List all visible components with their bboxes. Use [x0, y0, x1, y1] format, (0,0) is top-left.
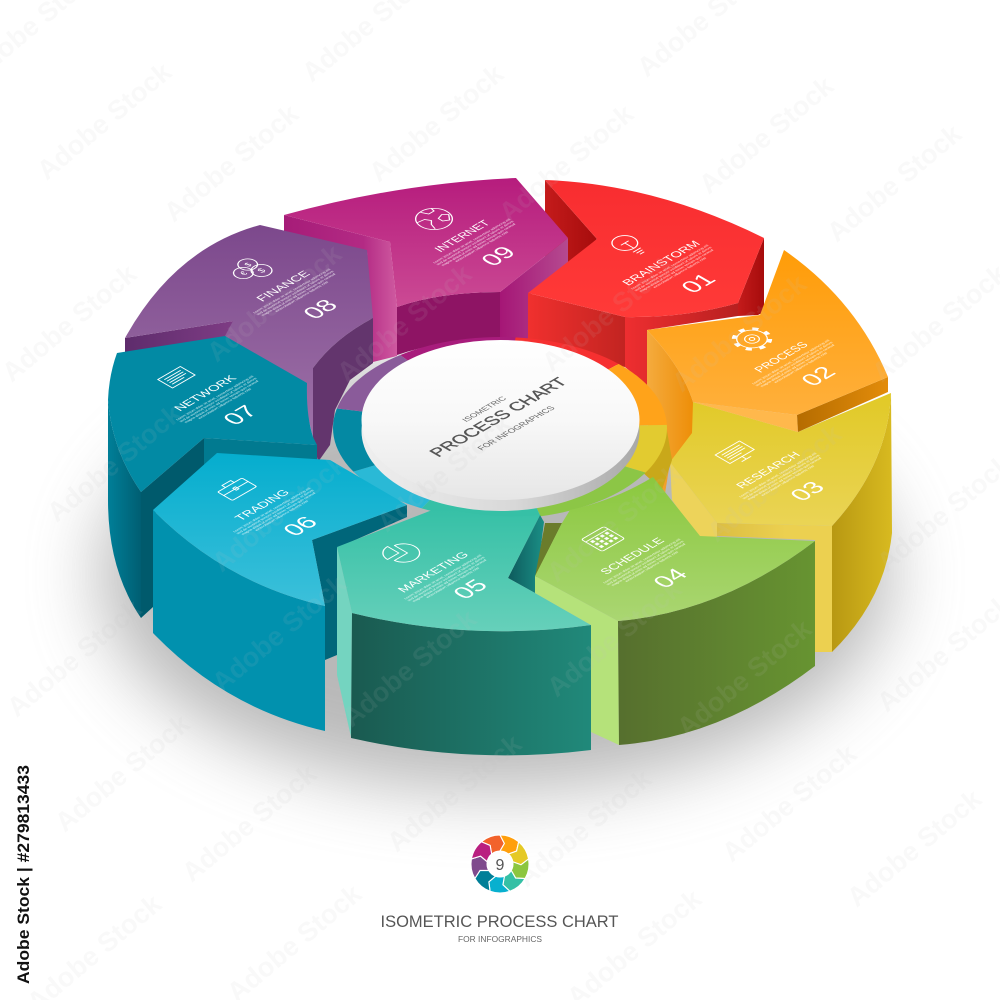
- body text: magna aliqua ut enim ad minim veniam quis nostrud: [411, 559, 488, 603]
- panel: 05 marketing: [337, 507, 591, 755]
- panel: 02 process: [647, 250, 888, 500]
- front wall light: [693, 402, 798, 432]
- panel: 04 schedule: [535, 477, 815, 745]
- top face: [670, 393, 891, 526]
- body text: [432, 218, 522, 270]
- watermark: Adobe Stock: [206, 568, 353, 698]
- footer title: ISOMETRIC PROCESS CHART: [380, 912, 618, 931]
- body text: [252, 268, 342, 320]
- ring: inner colored sectors: [333, 337, 672, 516]
- body text: Lorem ipsum dolor sit amet, consectetur adipiscing elit: [630, 244, 710, 290]
- body text: exercitation ullamco laboris nisi: [624, 551, 680, 583]
- front wall: [618, 541, 815, 745]
- number: 07: [217, 401, 263, 429]
- notch wall: [125, 321, 233, 356]
- body text: magna aliqua ut enim ad minim veniam quis nostrud: [440, 223, 517, 267]
- watermark: Adobe Stock: [493, 98, 640, 228]
- body text: [738, 452, 828, 504]
- body text: magna aliqua ut enim ad minim veniam quis nostrud: [610, 543, 687, 587]
- body text: sed do eiusmod tempor incididunt ut labore et dolore: [605, 540, 685, 586]
- body text: [232, 487, 322, 539]
- top face: [153, 453, 407, 606]
- body text: exercitation ullamco laboris nisi: [760, 465, 816, 497]
- hub rim: [362, 351, 640, 511]
- wall: red notch: [545, 180, 597, 285]
- watermark: Adobe Stock: [541, 573, 688, 703]
- notch wall: [535, 523, 562, 577]
- front wall dark: [797, 377, 888, 432]
- side stock credit: Adobe Stock | #279813433: [14, 765, 33, 984]
- body text: exercitation ullamco laboris nisi: [652, 257, 708, 289]
- icon: light bulb: [607, 232, 651, 258]
- body text: Lorem ipsum dolor sit amet, consectetur adipiscing elit: [738, 452, 818, 498]
- title: FINANCE: [254, 269, 314, 304]
- watermark: Adobe Stock: [31, 56, 178, 186]
- icon: document: [158, 366, 195, 388]
- number: 01: [675, 269, 721, 297]
- notch wall left: [141, 438, 204, 618]
- left wall: [337, 547, 352, 737]
- watermark: Adobe Stock: [511, 763, 658, 893]
- footer subtitle: FOR INFOGRAPHICS: [458, 934, 542, 944]
- body text: exercitation ullamco laboris nisi: [773, 352, 829, 384]
- top face: [647, 250, 888, 415]
- icon: briefcase: [214, 476, 257, 500]
- icon: globe: [408, 204, 460, 234]
- icon: coins: €: [238, 270, 250, 277]
- hub top: [362, 340, 640, 500]
- watermark: Adobe Stock: [701, 418, 848, 548]
- notch wall: [508, 515, 544, 593]
- body text: magna aliqua ut enim ad minim veniam quis nostrud: [638, 249, 715, 293]
- body text: Lorem ipsum dolor sit amet, consectetur adipiscing elit: [175, 375, 255, 421]
- body text: sed do eiusmod tempor incididunt ut labore et dolore: [435, 220, 515, 266]
- icon: coins: $: [255, 267, 268, 274]
- number: 08: [297, 295, 343, 323]
- body text: [175, 375, 265, 427]
- icon: footer logo wheel: [469, 833, 531, 893]
- outer wall: [153, 510, 325, 731]
- number: 06: [277, 512, 323, 540]
- panel: 07 network: [108, 336, 317, 618]
- body text: [630, 244, 720, 296]
- outer wall: [832, 393, 892, 652]
- icon: coins: [224, 255, 276, 285]
- top face: [528, 180, 764, 317]
- watermark: Adobe Stock: [381, 728, 528, 858]
- body text: magna aliqua ut enim ad minim veniam quis nostrud: [759, 344, 836, 388]
- icon: monitor: [715, 441, 759, 466]
- left inner wall: [528, 293, 625, 367]
- number: 05: [447, 575, 493, 603]
- inner wall: [313, 318, 373, 462]
- icon: coins: $: [242, 261, 254, 268]
- panel: 03 research: [670, 393, 892, 652]
- body text: sed do eiusmod tempor incididunt ut labore et dolore: [633, 246, 713, 292]
- watermark: Adobe Stock: [536, 248, 683, 378]
- icon: calendar: [581, 526, 625, 552]
- body text: [602, 538, 692, 590]
- watermark: Adobe Stock: [41, 398, 188, 528]
- right notch wall: [738, 238, 764, 316]
- body text: Lorem ipsum dolor sit amet, consectetur adipiscing elit: [232, 487, 312, 533]
- body text: Lorem ipsum dolor sit amet, consectetur adipiscing elit: [432, 218, 512, 264]
- watermark: Adobe Stock: [821, 118, 968, 248]
- body text: sed do eiusmod tempor incididunt ut labore et dolore: [255, 270, 335, 316]
- body text: magna aliqua ut enim ad minim veniam quis nostrud: [240, 492, 317, 536]
- body text: [403, 554, 493, 606]
- panel: 01 brainstorm: [528, 180, 764, 385]
- notch wall: [312, 505, 407, 660]
- body text: magna aliqua ut enim ad minim veniam quis nostrud: [183, 380, 260, 424]
- number: 09: [475, 242, 521, 270]
- watermark: Adobe Stock: [693, 70, 840, 200]
- hub subtitle: FOR INFOGRAPHICS: [475, 404, 557, 452]
- watermark: Adobe Stock: [336, 603, 483, 733]
- number: 03: [784, 477, 830, 505]
- body text: exercitation ullamco laboris nisi: [454, 231, 510, 263]
- top face: [535, 477, 815, 621]
- ring segments: [333, 337, 667, 516]
- body text: Lorem ipsum dolor sit amet, consectetur adipiscing elit: [751, 339, 831, 385]
- watermark: Adobe Stock: [666, 268, 813, 398]
- body text: [751, 339, 841, 391]
- body text: Lorem ipsum dolor sit amet, consectetur adipiscing elit: [403, 554, 483, 600]
- watermark: Adobe Stock: [331, 258, 478, 388]
- ring wall yellow: [640, 425, 672, 490]
- body text: sed do eiusmod tempor incididunt ut labore et dolore: [406, 556, 486, 602]
- panel: 06 trading: [153, 453, 407, 731]
- body text: exercitation ullamco laboris nisi: [425, 567, 481, 599]
- watermark: Adobe Stock: [371, 408, 518, 538]
- front wall: [717, 523, 832, 652]
- body text: exercitation ullamco laboris nisi: [274, 281, 330, 313]
- watermark: Adobe Stock: [158, 98, 305, 228]
- watermark: Adobe Stock: [716, 738, 863, 868]
- watermark: Adobe Stock: [201, 238, 348, 368]
- outer wall: [108, 400, 141, 618]
- body text: Lorem ipsum dolor sit amet, consectetur adipiscing elit: [252, 268, 332, 314]
- body text: exercitation ullamco laboris nisi: [254, 500, 310, 532]
- title: RESEARCH: [734, 450, 804, 491]
- title: TRADING: [233, 488, 293, 523]
- watermark: Adobe Stock: [49, 708, 196, 838]
- top face: [108, 336, 317, 492]
- number: 04: [647, 564, 694, 592]
- title: SCHEDULE: [598, 536, 668, 577]
- inner wall: [647, 330, 693, 500]
- body text: sed do eiusmod tempor incididunt ut labore et dolore: [235, 489, 315, 535]
- drop shadow: [100, 360, 890, 790]
- watermark: Adobe Stock: [541, 458, 688, 588]
- watermark: Adobe Stock: [1, 593, 148, 723]
- icon: footer logo wheel: 9: [496, 857, 505, 874]
- watermark: Adobe Stock: [671, 613, 818, 743]
- right inner wall: [625, 303, 738, 385]
- hub title: PROCESS CHART: [425, 375, 572, 460]
- top face: [337, 507, 591, 631]
- title: INTERNET: [433, 219, 493, 254]
- body text: exercitation ullamco laboris nisi: [197, 388, 253, 420]
- top face: [284, 178, 568, 307]
- title: NETWORK: [172, 374, 240, 413]
- watermark: Adobe Stock: [363, 58, 510, 188]
- body text: sed do eiusmod tempor incididunt ut labore et dolore: [741, 454, 821, 500]
- body text: Lorem ipsum dolor sit amet, consectetur adipiscing elit: [602, 538, 682, 584]
- body text: sed do eiusmod tempor incididunt ut labore et dolore: [754, 341, 834, 387]
- inner wall: [397, 292, 500, 355]
- title: MARKETING: [396, 550, 472, 595]
- panel: 08 finance: [125, 225, 373, 462]
- number: 02: [795, 362, 841, 390]
- icon: gear: [727, 324, 777, 354]
- icon: pie chart: [376, 539, 426, 567]
- left wall: [670, 462, 717, 540]
- notch wall right: [204, 438, 317, 470]
- body text: magna aliqua ut enim ad minim veniam quis nostrud: [260, 273, 337, 317]
- notch wall: [284, 215, 397, 362]
- left wall: [535, 576, 619, 745]
- watermark: Adobe Stock: [206, 448, 353, 578]
- top face: [125, 225, 373, 437]
- watermark: Adobe Stock: [176, 758, 323, 888]
- side wall: [500, 238, 568, 345]
- hub: center disc: [362, 340, 640, 511]
- front wall: [351, 613, 591, 755]
- body text: magna aliqua ut enim ad minim veniam quis nostrud: [746, 457, 823, 501]
- watermark: Adobe Stock: [841, 783, 988, 913]
- hub eyebrow: ISOMETRIC: [460, 395, 509, 423]
- title: PROCESS: [752, 340, 812, 375]
- body text: sed do eiusmod tempor incididunt ut labore et dolore: [178, 377, 258, 423]
- panel: 09 internet: [284, 178, 568, 362]
- title: BRAINSTORM: [620, 239, 703, 288]
- watermark: Adobe Stock: [0, 258, 143, 388]
